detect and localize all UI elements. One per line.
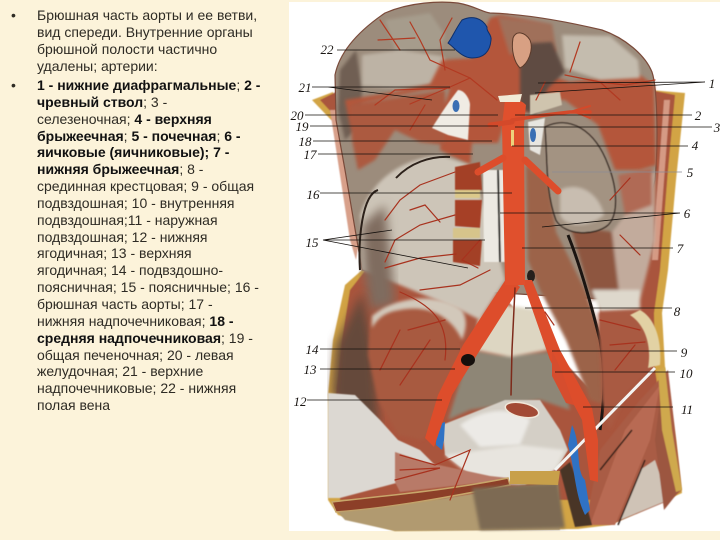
left lower white fascia [328, 393, 500, 498]
text block: artery legend: нижняя надпочечниковая; 18 - [37, 313, 234, 329]
peritoneum dark fold [360, 157, 450, 270]
left iliac fossa muscle [368, 304, 460, 440]
lumbar arteries and peritoneal vessels [380, 172, 645, 500]
text block: artery legend: ягодичная; 13 - верхняя [37, 245, 192, 261]
inguinal ligament band [332, 478, 510, 512]
white strap [555, 368, 655, 470]
text block: artery legend: брюшная часть аорты; 17 - [37, 296, 213, 312]
number labels: 10 [680, 366, 693, 381]
right peritoneum, grey-white [360, 155, 505, 320]
inferior vena cava, blue [448, 18, 491, 58]
peritoneum shading at lateral edge [362, 205, 395, 310]
number labels: 14 [306, 342, 319, 357]
liver surface patches [338, 13, 455, 140]
text block: artery legend: желудочная; 21 - верхние [37, 363, 203, 379]
white figure background [289, 2, 720, 531]
bullet 1: • [11, 7, 16, 23]
text block: artery legend: поясничная; 15 - поясничные; 16 - [37, 279, 259, 295]
number labels: 4 [692, 138, 699, 153]
text block: artery legend: чревный ствол; 3 - [37, 94, 167, 110]
diaphragm band above aorta [498, 94, 522, 102]
right thigh muscles [585, 367, 682, 525]
psoas muscle and abdominal right side [526, 165, 655, 410]
iliac crest, right pale [630, 310, 660, 368]
number labels: 19 [296, 119, 309, 134]
right iliac artery [522, 280, 598, 482]
number labels [290, 42, 720, 417]
number labels: 13 [304, 362, 317, 377]
text block: artery legend: общая печеночная; 20 - левая [37, 346, 234, 362]
inguinal red tissue [395, 452, 508, 492]
number labels: 11 [681, 402, 693, 417]
number labels: 6 [684, 206, 691, 221]
text block: artery legend: срединная крестцовая; 9 - общая [37, 178, 254, 194]
vertebral column with discs [453, 162, 510, 266]
number labels: 9 [681, 345, 688, 360]
text block: artery legend: подвздошная; 12 - нижняя [37, 229, 208, 245]
lower body tan [338, 483, 560, 531]
text block: intro: вид спереди. Внутренние органы [37, 24, 253, 40]
aorta [502, 99, 526, 285]
text block: artery legend: нижняя брыжеечная; 8 - [37, 161, 203, 177]
diaphragm muscle [345, 15, 656, 170]
text block: intro: брюшной полости частично [37, 41, 217, 57]
leader line to label 5 [552, 171, 682, 173]
number labels: 22 [320, 42, 334, 57]
text block: intro: Брюшная часть аорты и ее ветви, [37, 7, 257, 23]
number labels: 18 [298, 134, 312, 149]
text block: artery legend: подвздошная; 10 - внутренняя [37, 195, 234, 211]
text block: artery legend: полая вена [37, 397, 110, 413]
panel: caption text [11, 7, 260, 413]
left iliac artery [425, 276, 520, 447]
number labels: 2 [695, 108, 702, 123]
sacrum grey [448, 350, 570, 420]
number labels: 8 [674, 304, 681, 319]
esophagus stump [512, 33, 531, 68]
renal arteries [478, 158, 558, 191]
aorta highlight [511, 130, 514, 146]
pubic bone band [510, 471, 560, 485]
number labels: 7 [677, 241, 684, 256]
dark folds near spine [527, 235, 604, 430]
number labels: 5 [687, 165, 694, 180]
pale promontory [475, 305, 548, 357]
iliac black occlusion [461, 354, 475, 366]
number labels: 12 [294, 394, 307, 409]
pubic region [472, 483, 565, 530]
text block: artery legend: яичковые (яичниковые); 7 - [37, 144, 229, 160]
text block: intro [37, 7, 257, 74]
leader lines [305, 50, 712, 407]
liver gap: white structure with blue vessel [432, 90, 470, 140]
text block: artery legend: надпочечниковые; 22 - нижняя [37, 380, 236, 396]
text block: intro: удалены; артерии: [37, 58, 158, 74]
bladder opening [504, 400, 540, 420]
text block: artery legend: средняя надпочечниковая; 19 - [37, 330, 253, 346]
text block: artery legend: 1 - нижние диафрагмальные; 2 - [37, 77, 260, 93]
celiac trunk and splenic artery [490, 106, 590, 125]
lower left wall shading [332, 292, 380, 440]
bullet 2: • [11, 77, 16, 93]
number labels: 21 [298, 80, 312, 95]
pale band above iliac fossa [372, 299, 466, 340]
text block: artery legend: брыжеечная; 5 - почечная; 6 - [37, 128, 241, 144]
bladder white [442, 400, 568, 485]
right upper light patch [562, 35, 640, 80]
number labels: 16 [306, 187, 320, 202]
femoral shadow and veins [436, 422, 592, 527]
small arteries on diaphragm [375, 18, 655, 130]
dark shadow beside aorta [520, 42, 565, 115]
right iliac muscle [598, 310, 655, 430]
upper body: diaphragm and liver surface [335, 2, 657, 300]
text block: artery legend [37, 77, 260, 413]
number labels: 1 [709, 76, 715, 91]
text block: artery legend: селезеночная; 4 - верхняя [37, 111, 212, 127]
abdominal wall: fat and muscle layers [312, 90, 685, 531]
number labels: 15 [306, 235, 319, 250]
number labels: 17 [304, 147, 317, 162]
internal iliac branch [552, 350, 574, 405]
number labels: 20 [290, 108, 304, 123]
text block: artery legend: подвздошная;11 - наружная [37, 212, 218, 228]
text block: artery legend: ягодичная; 14 - подвздошно- [37, 262, 223, 278]
left kidney with vessel [528, 92, 616, 233]
